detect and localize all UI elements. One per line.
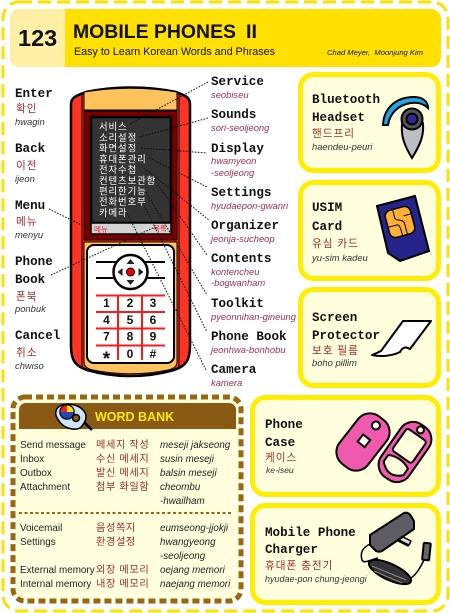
soft key strip [91,223,171,234]
label: Cancel: chwiso [15,360,44,371]
label: Menu: 메뉴 [16,216,38,228]
label: Cancel: 취소 [16,347,38,359]
menu items: 편리한기능 [99,186,147,196]
label: Contents [211,252,271,288]
subtitle: Easy to Learn Korean Words and Phrases [74,46,276,58]
panel: bluetooth headset: Bluetooth [312,93,380,107]
screen frame [84,111,177,240]
authors: Chad Meyer, Moonjung Kim [327,48,423,57]
panel: USIM card: yu-sim kadeu [311,252,369,263]
menu items: 전자수첩 [99,164,137,175]
label: Phone Book: Phone Book [211,330,287,344]
label: Settings [211,186,289,211]
vocabulary list two: hwangyeong [160,537,216,548]
vocabulary list two: 내장 메모리 [96,578,149,590]
label: Sounds: Sounds [211,108,256,122]
label: Organizer: jeonja-sucheop [209,233,275,244]
vocabulary list one: 발신 메세지 [96,467,149,479]
label: Contents: Contents [211,252,271,266]
keypad: 2 [127,296,134,310]
left labels [14,87,61,371]
vocabulary list two: 외장 메모리 [96,564,149,576]
label: Cancel [15,329,61,371]
menu items: 휴대폰관리 [99,154,147,164]
panel: phone case: Phone [265,418,303,432]
panel: screen protector: boho pillim [312,357,357,368]
label: Phone Book: Book [15,273,46,287]
panel: mobile phone charger: Mobile Phone [265,526,356,540]
leader lines [49,82,209,370]
vocabulary list two: Settings [20,537,56,548]
icon: film sheet [372,321,431,356]
label: Menu: menyu [15,229,44,240]
header banner [10,9,441,67]
label: Camera: kamera [211,377,242,388]
label: Toolkit [210,297,297,322]
label: Sounds [211,108,270,133]
icon: pink cases [330,407,437,488]
keypad: 1 [103,296,110,310]
vocabulary list two: 음성쪽지 [96,522,136,534]
panel: screen protector [300,290,438,386]
menu items: 화면설정 [99,142,137,154]
label: Back: 이전 [16,160,38,172]
vocabulary list two: External memory [20,565,95,576]
label: Cancel: Cancel [15,329,61,343]
keypad: 7 [103,330,110,344]
navigation button [114,255,148,289]
label: Phone Book: 폰북 [16,291,38,303]
vocabulary list one: 수신 메세지 [96,453,149,465]
label: Toolkit: pyeonnihan-gineung [210,311,297,322]
panel: bluetooth headset: haendeu-peuri [312,141,373,152]
earpiece panel [84,88,177,110]
vocabulary list two: -seoljeong [160,551,206,562]
label: Camera: Camera [211,363,257,377]
vocabulary list one: Inbox [20,454,44,465]
keypad: 9 [150,330,157,344]
vocabulary list one: balsin meseji [160,468,217,479]
soft key strip: 목록 [153,224,167,233]
label: Phone Book: Phone [15,255,53,269]
panel: phone case: ke-iseu [266,465,294,475]
label: Camera [211,363,257,388]
vocabulary list two: Internal memory [20,579,91,590]
title: MOBILE PHONES [73,22,236,43]
vocabulary list two: naejang memori [160,579,231,590]
label: Enter [15,87,53,127]
keypad [87,245,174,370]
vocabulary list two: 환경설정 [96,535,136,548]
label: Display [211,142,264,178]
keypad panel [84,242,177,374]
label: Back [15,142,46,184]
label: Phone Book: jeonhwa-bonhobu [209,344,286,355]
vocabulary list one [20,439,231,507]
keypad: # [150,347,157,361]
vocabulary list two: oejang memori [160,565,226,576]
vocabulary list one: Send message [20,440,86,451]
word bank header: WORD BANK [95,410,174,424]
panel: screen protector: Protector [312,329,380,343]
panel: USIM card: Card [312,220,342,234]
screen [91,117,171,223]
icon: palette [56,404,92,430]
label: Phone Book: ponbuk [14,303,47,314]
keypad: 6 [150,313,157,327]
keypad: 4 [103,313,110,327]
keypad: 0 [127,347,134,361]
keypad: * [103,349,111,370]
panel: bluetooth headset: Headset [312,111,365,125]
panel: bluetooth headset [300,74,438,170]
panel: USIM card: USIM [312,201,342,215]
vocabulary list two [20,522,231,590]
word bank header [19,403,236,430]
right labels [209,75,297,388]
menu items: 카메라 [99,207,128,218]
label: Organizer [209,219,279,244]
icon: headset [383,97,428,158]
panel: mobile phone charger: 휴대폰 충전기 [265,560,333,572]
soft key strip: 메뉴 [94,225,108,234]
label: Service: Service [211,75,264,89]
vocabulary list one: meseji jakseong [160,440,231,451]
label: Display: -seoljeong [211,167,255,178]
panel: bluetooth headset: 핸드프리 [312,128,355,140]
panel: mobile phone charger: hyudae-pon chung-jeongi [265,574,368,584]
label: Settings: hyudaepon-gwanri [211,200,289,211]
label: Enter: Enter [15,87,53,101]
lesson number: 123 [18,25,57,51]
label: Enter: 확인 [16,102,38,115]
label: Phone Book [14,255,53,314]
label: Service [211,75,264,100]
menu items: 전화번호부 [99,196,147,207]
label: Phone Book [209,330,287,355]
panel: mobile phone charger [252,506,438,602]
phone illustration [71,88,190,376]
vocabulary list one: cheombu [160,482,201,493]
panel: screen protector: Screen [312,311,357,325]
panel: phone case: Case [265,436,295,450]
panel: phone case: 케이스 [265,452,297,464]
label: Sounds: sori-seoljeong [211,122,270,133]
label: Back: Back [15,142,46,156]
keypad: 5 [127,313,134,327]
title numeral: II [246,22,257,43]
panel: USIM card [300,182,438,278]
vocabulary list one: Attachment [20,482,70,493]
label: Toolkit: Toolkit [211,297,264,311]
vocabulary list one: -hwailham [160,496,205,507]
label: Contents: -bogwanham [211,277,265,288]
label: Display: Display [211,142,264,156]
menu items [99,121,156,218]
phone body [71,88,190,376]
vocabulary list two: eumseong-jjokji [160,523,229,534]
label: Back: ijeon [15,173,35,184]
menu items: 서비스 [99,121,128,132]
menu items: 소리설정 [99,132,137,143]
label: Organizer: Organizer [211,219,279,233]
icon: charger [361,513,431,589]
icon: SIM card [377,196,429,261]
vocabulary list one: 메세지 작성 [96,439,149,451]
label: Enter: hwagin [15,116,45,127]
panel: mobile phone charger: Charger [265,543,318,557]
label: Display: hwamyeon [211,155,256,166]
vocabulary list one: Outbox [20,468,52,479]
keypad: 8 [127,330,134,344]
keypad: 3 [150,296,157,310]
label: Menu [15,199,45,240]
panel: USIM card: 유심 카드 [312,238,359,250]
menu items: 컨텐츠보관함 [99,175,156,186]
label: Contents: kontencheu [211,266,260,277]
label: Service: seobiseu [211,89,249,100]
label: Settings: Settings [211,186,271,200]
vocabulary list one: susin meseji [160,454,215,465]
panel: screen protector: 보호 필름 [312,345,359,357]
panel: phone case [252,398,438,494]
vocabulary list two: Voicemail [20,523,62,534]
vocabulary list one: 첨부 화일함 [96,481,149,493]
label: Menu: Menu [15,199,45,213]
panel: word bank [13,397,241,601]
